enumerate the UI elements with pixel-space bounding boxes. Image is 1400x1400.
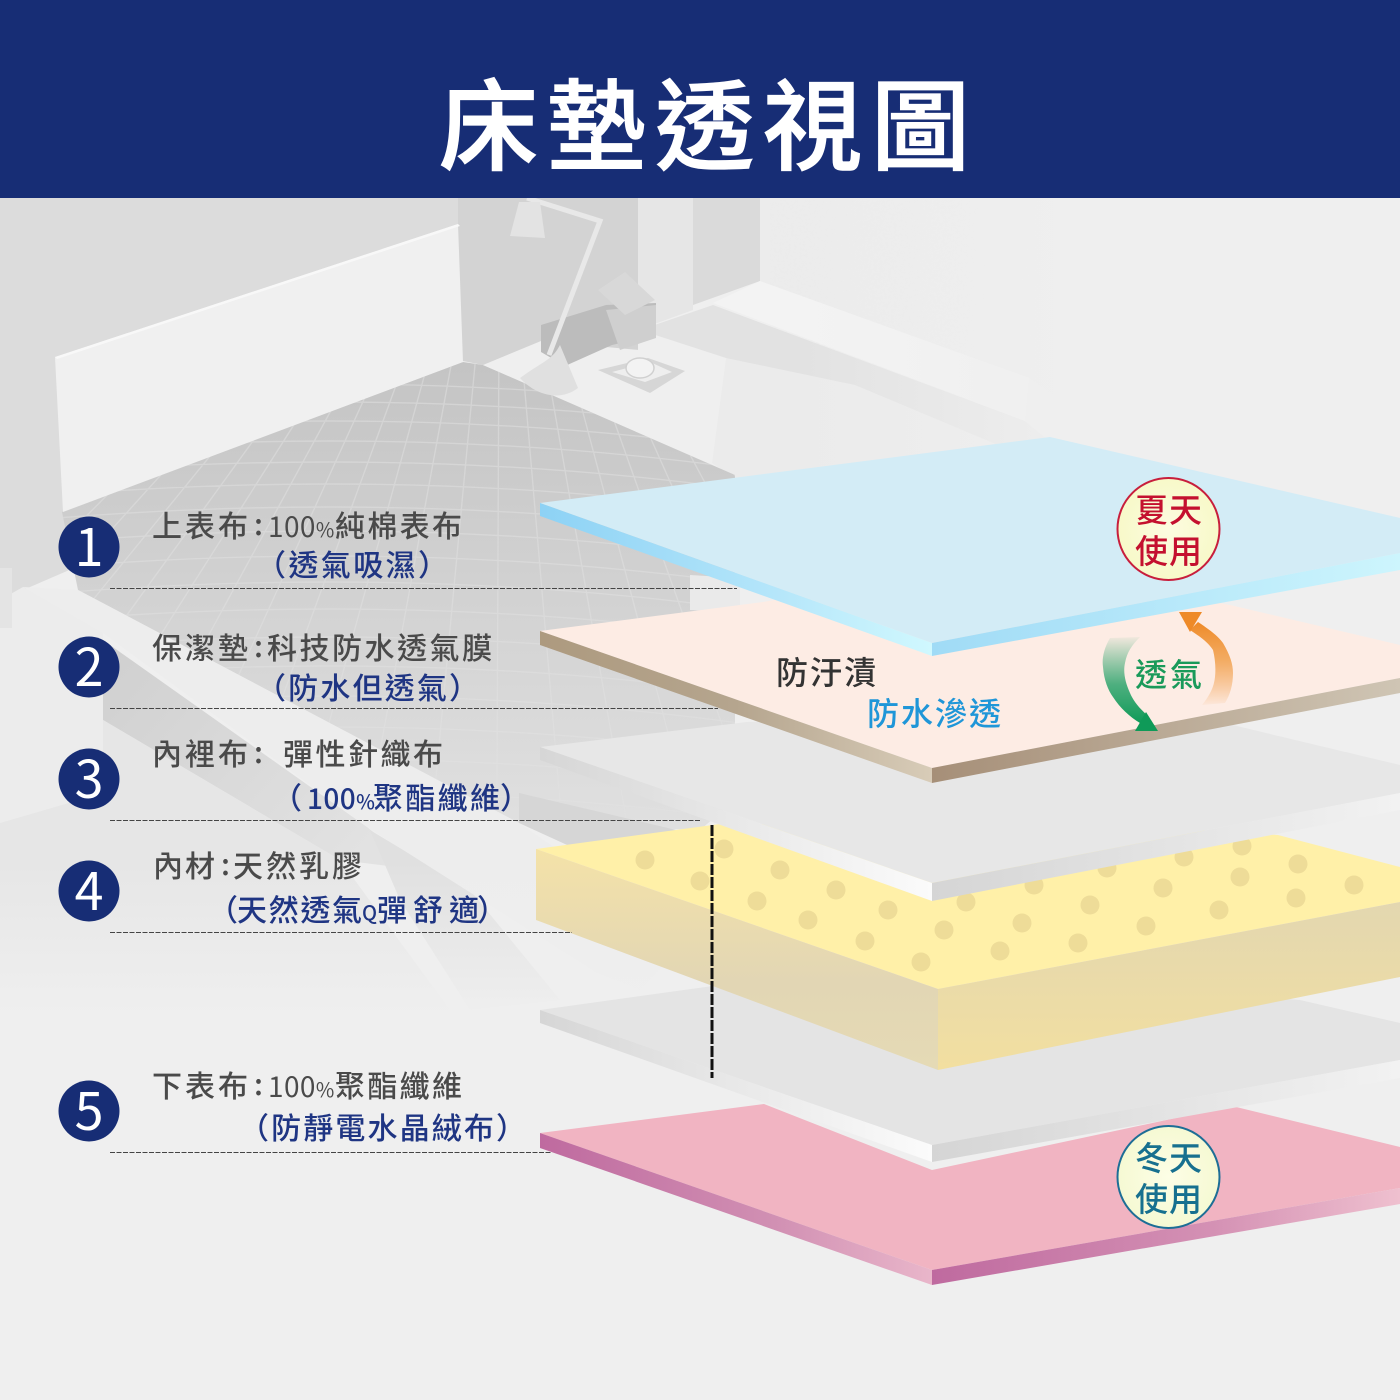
item 2: 科技防水透氣膜 [267, 624, 492, 668]
item 2: 保潔墊 [152, 624, 248, 668]
item 1: 上表布 [152, 502, 248, 546]
item 1: : [254, 500, 263, 544]
item 3: （ [272, 774, 302, 818]
item 1: 100% [268, 506, 335, 546]
item 3: 聚酯纖維 [373, 774, 500, 818]
item 3: ） [500, 774, 530, 818]
item 3: 3 [75, 738, 103, 813]
item 4: 彈舒適 [377, 886, 479, 930]
arrow: green down [1103, 637, 1158, 731]
title: 床墊透視圖 [439, 47, 970, 191]
bed frame band [103, 640, 420, 870]
item 4: 天然透氣 [237, 886, 362, 930]
item 4: : [221, 840, 230, 884]
item 5: 5 [75, 1070, 103, 1145]
item 1 [58, 500, 737, 588]
item 3: 彈性針織布 [283, 730, 443, 774]
layer 2: peach protector [540, 560, 1400, 783]
item 3: 100% [307, 778, 375, 818]
item 2: : [254, 622, 263, 666]
label: stain proof: 防汙漬 [776, 648, 876, 694]
mattress quilting [64, 364, 735, 578]
layer 1: blue summer top fabric [540, 437, 1400, 656]
item 4: ） [477, 886, 507, 930]
item 5: 下表布 [152, 1062, 248, 1106]
badge: summer use: 使用 [1135, 525, 1202, 573]
item 5: 聚酯纖維 [335, 1062, 462, 1106]
item 5 [58, 1060, 552, 1152]
badge: summer use [1118, 478, 1220, 580]
item 2: 2 [75, 626, 103, 701]
label: waterproof: 防水滲透 [867, 689, 1001, 735]
white block beside the mattress [690, 575, 740, 612]
arrow: orange up [1179, 612, 1233, 705]
item 4: Q [362, 897, 377, 926]
item 2 [58, 622, 718, 708]
badge: winter use: 冬天 [1135, 1132, 1202, 1180]
label: breathable: 透氣 [1135, 650, 1202, 696]
item 1: （透氣吸濕） [256, 541, 448, 585]
item 4: 內材 [153, 842, 215, 886]
item 5: 100% [268, 1066, 335, 1106]
layer 3: grey inner fabric [540, 715, 1400, 901]
item 1: 純棉表布 [335, 502, 462, 546]
item 5: （防靜電水晶絨布） [239, 1104, 526, 1148]
latex holes [636, 836, 1364, 972]
layer 4b: lower grey fabric [540, 985, 1400, 1162]
title banner [0, 0, 1400, 198]
item 4 [58, 840, 572, 932]
item 5: : [254, 1060, 263, 1104]
layer 5: pink winter fabric [540, 1104, 1400, 1285]
item 4: （ [208, 886, 238, 930]
badge: summer use: 夏天 [1135, 484, 1202, 532]
desk lamp [510, 198, 600, 395]
item 4: 天然乳膠 [233, 842, 362, 886]
item 3: : [254, 728, 263, 772]
item 1: 1 [75, 506, 103, 581]
item 3: 內裡布 [152, 730, 248, 774]
item 3 [58, 728, 700, 820]
background bedroom photo [0, 198, 906, 932]
badge: winter use [1118, 1126, 1220, 1228]
layer 4: yellow latex core [536, 824, 1400, 1070]
vertical dashed guide [710, 825, 714, 1078]
item 2: （防水但透氣） [256, 664, 479, 708]
item 4: 4 [75, 850, 103, 925]
badge: winter use: 使用 [1135, 1173, 1202, 1221]
breathable arrows [1103, 612, 1233, 731]
